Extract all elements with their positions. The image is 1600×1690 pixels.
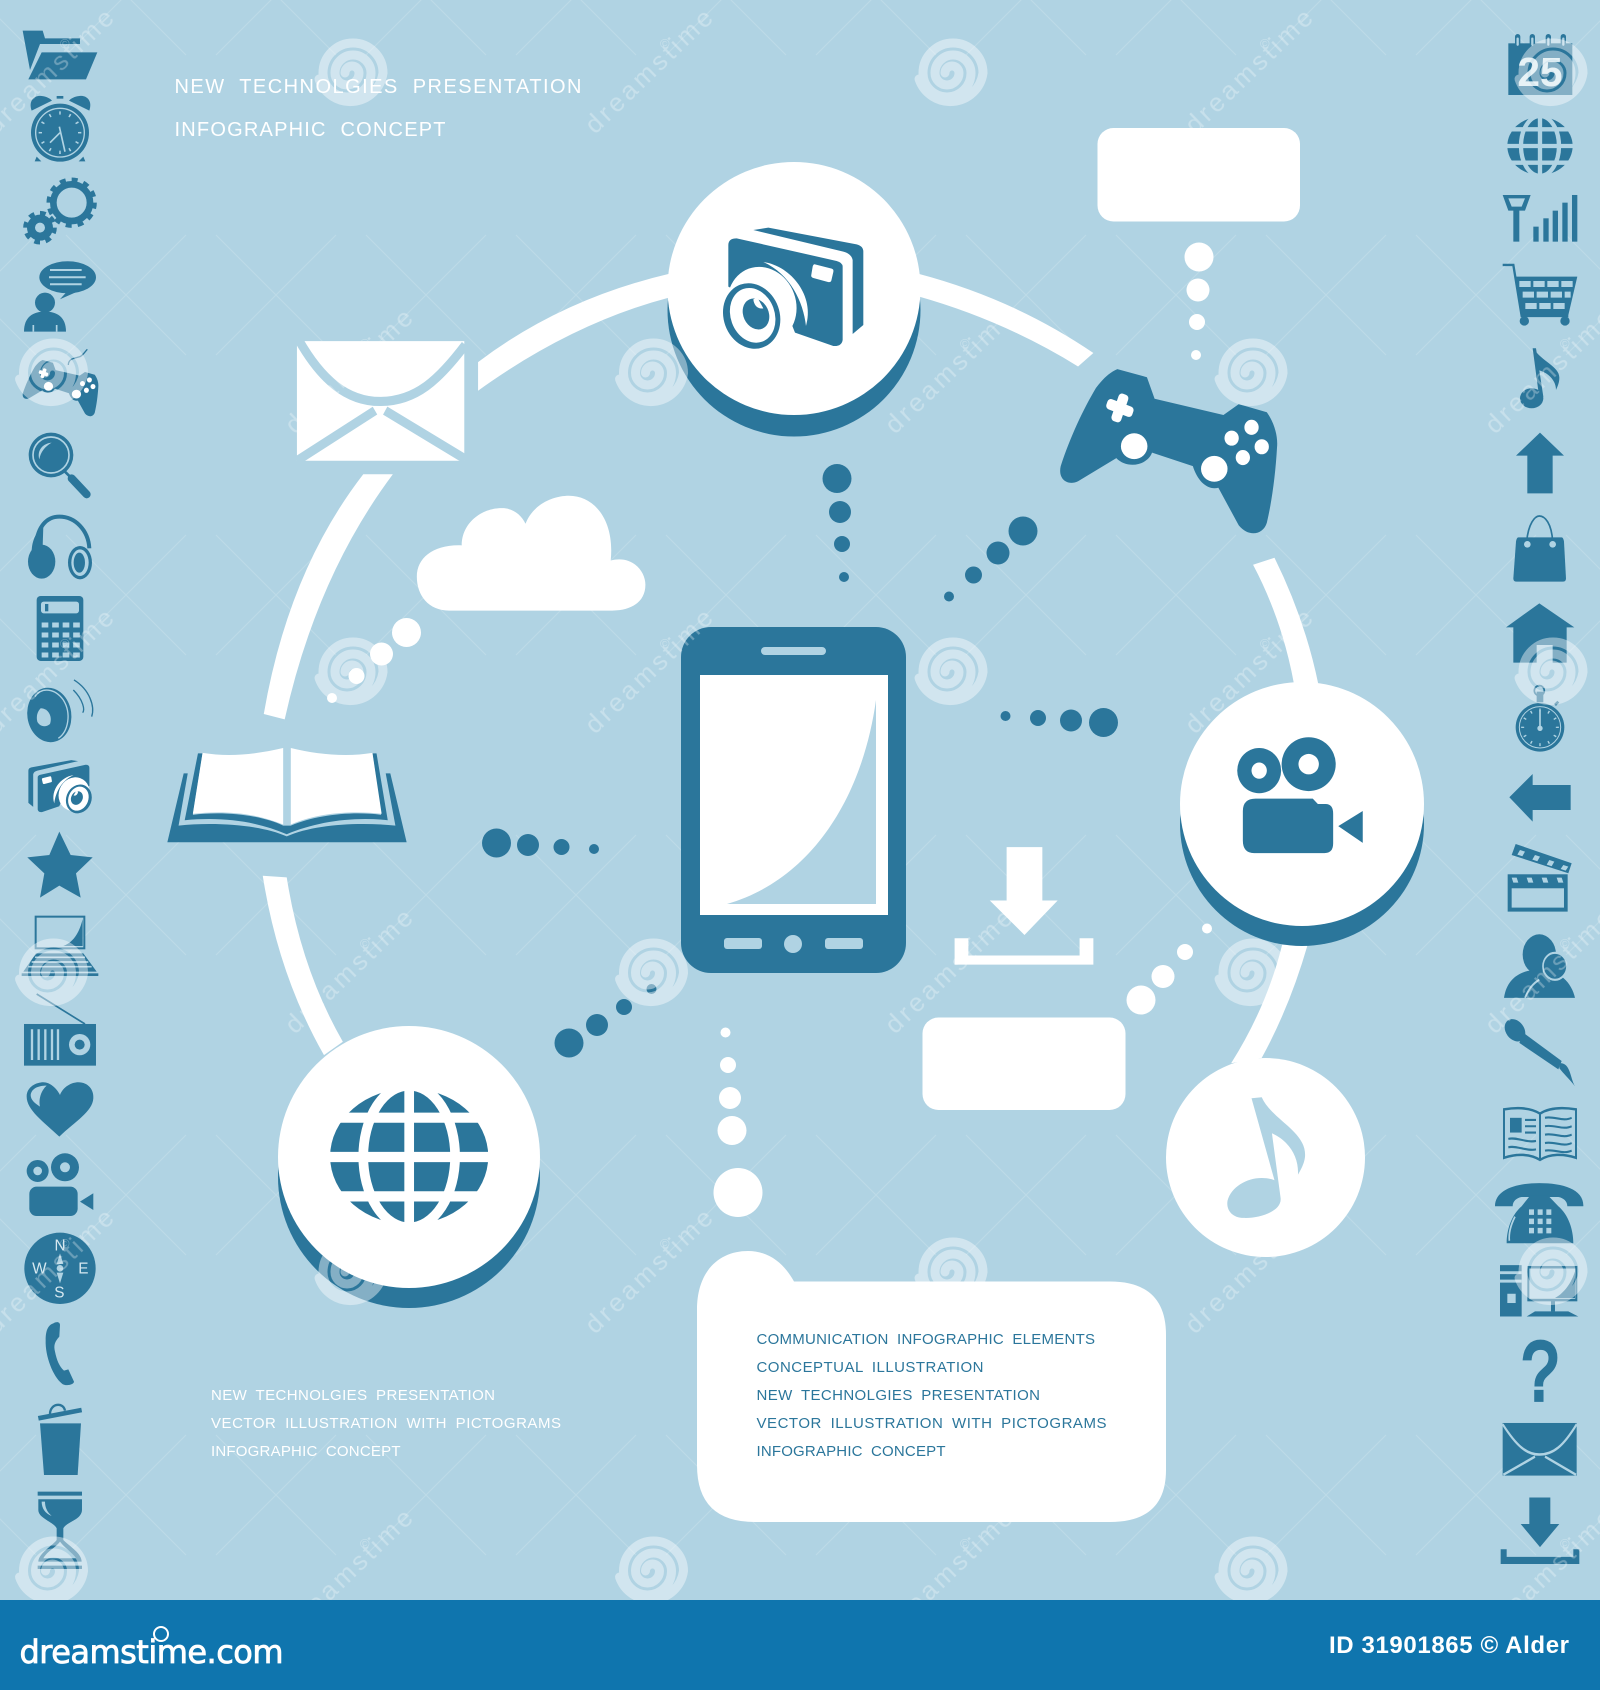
lower left text: INFOGRAPHIC CONCEPT (211, 1443, 400, 1460)
camera circle (668, 162, 920, 436)
icon: compass: W (32, 1261, 47, 1278)
icon: camera small (28, 760, 96, 817)
icon: download (955, 847, 1093, 965)
panel text: NEW TECHNOLGIES PRESENTATION (756, 1387, 1040, 1404)
icon: cloud (417, 496, 645, 611)
icon: telephone handset (46, 1322, 74, 1385)
watermark: dreamstime text: dreamstime (278, 902, 419, 1039)
icon: microphone (1501, 1015, 1575, 1086)
icon: envelope small (1503, 1423, 1577, 1476)
icon: heart (27, 1082, 93, 1137)
watermark: dreamstime text: © (1560, 936, 1570, 951)
dots: phone to video (1000, 708, 1118, 737)
icon: music note small (1520, 348, 1559, 408)
icon: stopwatch (1516, 686, 1564, 752)
icon: laptop (22, 917, 98, 976)
watermark: dreamstime text: © (1560, 336, 1570, 351)
speech box: middle (922, 1018, 1126, 1110)
icon: calendar (1508, 37, 1572, 95)
icon: left arrow (1509, 774, 1571, 822)
smartphone (681, 627, 906, 973)
icon: download small (1501, 1497, 1579, 1564)
footer bar (0, 1600, 1600, 1690)
icon: globe small (1505, 115, 1575, 177)
watermark: dreamstime text: dreamstime (878, 902, 1019, 1039)
icon: question mark: ? (1522, 1324, 1558, 1418)
icon: open book (167, 748, 407, 842)
panel text (756, 1331, 1106, 1460)
title text: INFOGRAPHIC CONCEPT (174, 119, 446, 141)
watermark: dreamstime text: © (660, 636, 670, 651)
watermark: dreamstime text: © (1560, 1536, 1570, 1551)
watermark: dreamstime text: © (360, 336, 370, 351)
icon: globe (327, 1085, 492, 1229)
icon: star (27, 832, 93, 898)
icon: loudspeaker (24, 680, 93, 745)
icon: trash can (38, 1405, 82, 1475)
watermark: dreamstime text: dreamstime (878, 1502, 1019, 1639)
watermark: dreamstime text: dreamstime (278, 1502, 419, 1639)
watermark: dreamstime text: © (960, 936, 970, 951)
icon: movie camera (1237, 737, 1363, 853)
icon: shopping cart (1503, 265, 1577, 326)
icon: calculator (37, 596, 83, 661)
watermark: dreamstime text: © (660, 36, 670, 51)
lower left text: VECTOR ILLUSTRATION WITH PICTOGRAMS (211, 1415, 561, 1432)
panel text: COMMUNICATION INFOGRAPHIC ELEMENTS (756, 1331, 1095, 1348)
watermark: dreamstime text: dreamstime (878, 302, 1019, 439)
dots: camera to phone (822, 464, 852, 582)
dots: controller to phone (944, 516, 1038, 602)
dots: book to phone (482, 828, 599, 858)
icon: radio (24, 994, 96, 1066)
watermark: dreamstime text: © (1260, 36, 1270, 51)
icon: compass: E (78, 1261, 88, 1278)
icon: person with speech bubble (24, 261, 96, 332)
watermark: dreamstime text: © (660, 1236, 670, 1251)
icon: desktop computer (1500, 1265, 1578, 1316)
watermark: dreamstime text: © (360, 1536, 370, 1551)
watermark: dreamstime text: dreamstime (1178, 1202, 1319, 1339)
title text: NEW TECHNOLGIES PRESENTATION (174, 76, 582, 98)
icon: camera (714, 228, 863, 357)
video camera circle (1180, 682, 1424, 946)
text panel (697, 1251, 1166, 1522)
title text (174, 76, 582, 141)
icon: up arrow (1516, 433, 1564, 493)
watermark: dreamstime text: © (1260, 636, 1270, 651)
globe circle (278, 1026, 540, 1308)
icon: newspaper book (1504, 1108, 1576, 1160)
icon: alarm clock (31, 96, 90, 162)
icon: compass (24, 1233, 96, 1304)
icon: handbag (1513, 516, 1566, 582)
speech box: top (1098, 128, 1300, 222)
watermark: dreamstime text: © (60, 636, 70, 651)
icon: hourglass (38, 1492, 82, 1569)
icon: movie camera small (27, 1153, 93, 1216)
dots: top box (1184, 242, 1214, 360)
icon: envelope (297, 340, 465, 461)
watermark: dreamstime text: © (360, 936, 370, 951)
left icon column (22, 31, 98, 1569)
watermark: dreamstime text: dreamstime (1178, 2, 1319, 139)
watermark: dreamstime text: © (1260, 1236, 1270, 1251)
watermark: dreamstime text: dreamstime (578, 2, 719, 139)
icon: compass: N (54, 1238, 66, 1255)
panel text: INFOGRAPHIC CONCEPT (756, 1443, 946, 1460)
watermark: dreamstime text: © (960, 336, 970, 351)
icon: two people (1504, 934, 1575, 998)
lower left text: NEW TECHNOLGIES PRESENTATION (211, 1387, 495, 1404)
music circle (1166, 1058, 1365, 1257)
right icon column (1495, 37, 1583, 1564)
icon: folder (23, 31, 97, 79)
ring arcs connecting icons (263, 274, 1318, 1063)
icon: desk telephone (1495, 1183, 1583, 1243)
icon: gears (25, 180, 95, 242)
icon: game controller (1060, 369, 1277, 533)
watermark: dreamstime text: © (60, 36, 70, 51)
lower left text (211, 1387, 561, 1460)
panel text: VECTOR ILLUSTRATION WITH PICTOGRAMS (756, 1415, 1106, 1432)
watermark: dreamstime text: dreamstime (578, 1202, 719, 1339)
icon: house (1506, 603, 1574, 663)
icon: music note (1227, 1097, 1305, 1218)
icon: magnifier (29, 433, 87, 494)
watermark: dreamstime text: © (960, 1536, 970, 1551)
dots: globe to phone (554, 984, 656, 1058)
icon: signal bars (1503, 195, 1577, 242)
watermark: dreamstime text: © (60, 1236, 70, 1251)
icon: game controller small (23, 349, 98, 416)
image id: ID 31901865 © Alder (1329, 1632, 1569, 1659)
icon: compass: S (54, 1284, 64, 1301)
watermark: dreamstime text: dreamstime (578, 602, 719, 739)
dots: middle box (1126, 924, 1212, 1014)
icon: calendar: 25 (1517, 49, 1563, 95)
watermark: dreamstime text: dreamstime (1178, 602, 1319, 739)
footer logo: dreamstime.com (20, 1633, 284, 1671)
dots: text panel (714, 1028, 762, 1217)
icon: clapperboard (1508, 844, 1572, 912)
panel text: CONCEPTUAL ILLUSTRATION (756, 1359, 984, 1376)
watermark: dreamstime text: dreamstime (278, 302, 419, 439)
dots: cloud (327, 618, 421, 703)
icon: headphones (28, 517, 92, 579)
